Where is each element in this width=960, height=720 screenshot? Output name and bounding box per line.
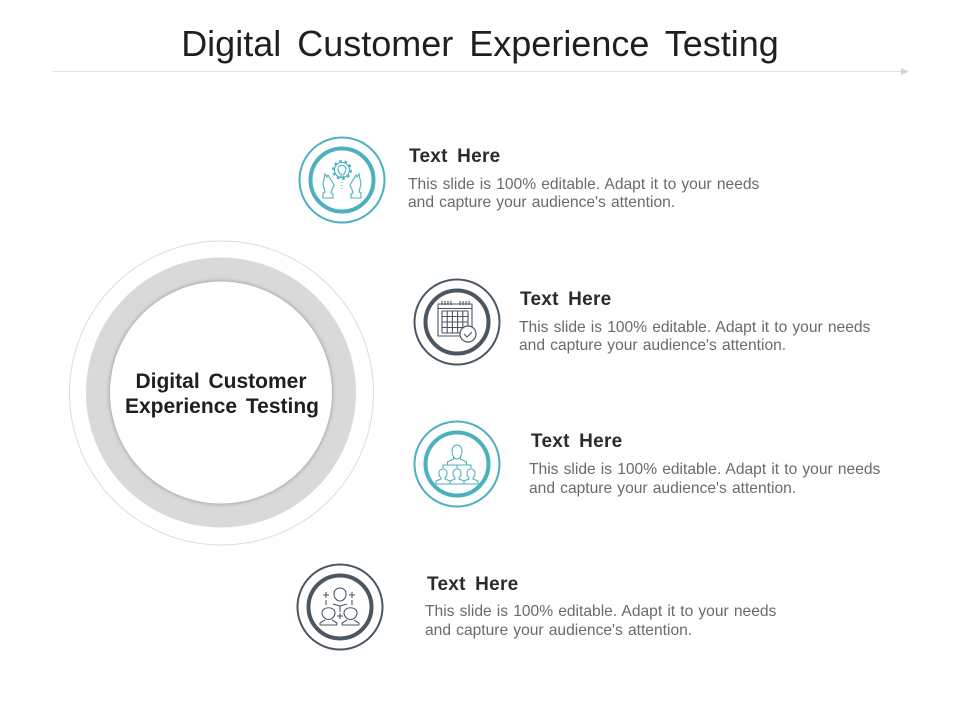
- text block 2: [519, 289, 871, 354]
- text block 1: This slide is 100% editable. Adapt it to your needs: [408, 176, 760, 193]
- text block 4: Text Here: [427, 574, 518, 595]
- central circle: [70, 241, 374, 545]
- icon: hands with lightbulb gear: [300, 138, 384, 222]
- text block 1: and capture your audience's attention.: [408, 194, 675, 211]
- text block 2: Text Here: [520, 289, 611, 310]
- central label: Digital Customer: [135, 370, 307, 393]
- text block 4: [425, 574, 777, 639]
- text block 1: [408, 146, 760, 211]
- text block 1: Text Here: [409, 146, 500, 167]
- text block 3: Text Here: [531, 431, 622, 452]
- text block 2: and capture your audience's attention.: [519, 337, 786, 354]
- title: Digital Customer Experience Testing: [181, 23, 779, 64]
- text block 3: and capture your audience's attention.: [529, 480, 796, 497]
- icon: calendar with clock: [414, 280, 500, 364]
- icon: org hierarchy people: [414, 422, 500, 506]
- title divider arrow: [52, 68, 909, 75]
- text block 3: [529, 431, 881, 497]
- text block 4: and capture your audience's attention.: [425, 622, 692, 639]
- central circle: Experience Testing: [125, 395, 319, 418]
- text block 2: This slide is 100% editable. Adapt it to your needs: [519, 319, 871, 336]
- icon: team of three people: [298, 564, 382, 650]
- text block 3: This slide is 100% editable. Adapt it to your needs: [529, 461, 881, 478]
- text block 4: This slide is 100% editable. Adapt it to your needs: [425, 603, 777, 620]
